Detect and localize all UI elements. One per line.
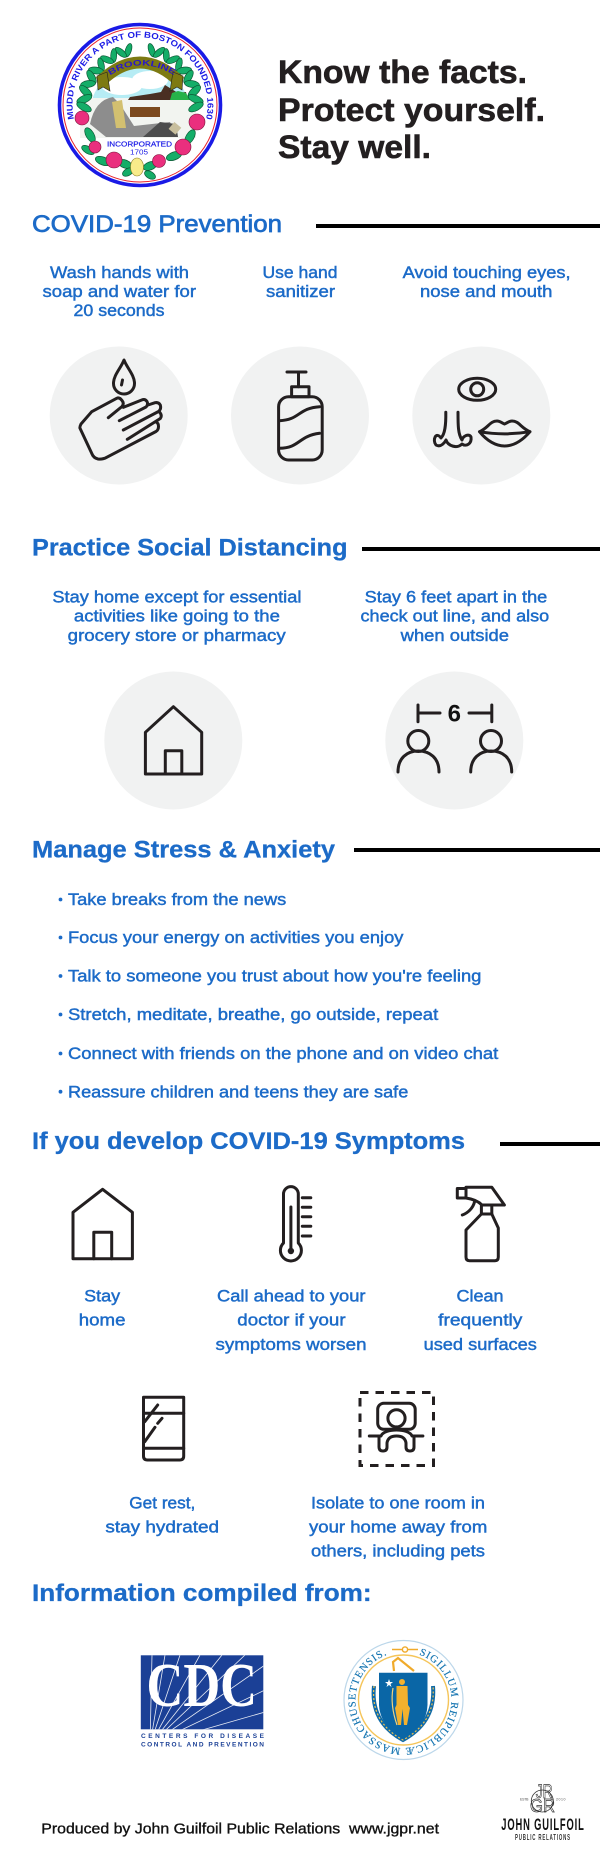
text: use hand sanitizer bbox=[262, 264, 338, 301]
logo: CDC bbox=[141, 1652, 265, 1748]
logo: CDC: CENTERS FOR DISEASE bbox=[141, 1733, 265, 1740]
text: stay home except essentials: Stay home except for essential bbox=[52, 589, 301, 607]
text: get rest: Get rest, bbox=[129, 1494, 195, 1512]
list: stress tips: Stretch, meditate, breathe, go outside, repeat bbox=[68, 1006, 439, 1024]
text: producer credit: Produced by John Guilfoil Public Relations www.jgpr.net bbox=[41, 1820, 440, 1837]
text: stay 6 feet apart bbox=[360, 589, 549, 645]
text: clean surfaces: Clean bbox=[456, 1288, 504, 1306]
icon: sanitizer pump bottle bbox=[231, 346, 369, 484]
icon: house bbox=[104, 672, 242, 810]
logo: John Guilfoil Public Relations bbox=[501, 1782, 584, 1842]
text: avoid touching face: Avoid touching eyes, bbox=[403, 264, 571, 282]
text: isolate: Isolate to one room in bbox=[311, 1494, 485, 1512]
logo: CDC: CONTROL AND PREVENTION bbox=[141, 1742, 264, 1748]
text: stay 6 feet apart: Stay 6 feet apart in the bbox=[365, 589, 547, 607]
list: stress tips: Connect with friends on the phone and on video chat bbox=[68, 1045, 499, 1063]
text: stay home: home bbox=[79, 1312, 126, 1330]
logo: CDC: CDC bbox=[146, 1652, 257, 1720]
icon: glass of water bbox=[144, 1397, 184, 1460]
text: call ahead: doctor if your bbox=[237, 1312, 346, 1330]
text: wash hands: soap and water for bbox=[42, 283, 197, 301]
logo: John Guilfoil Public Relations: GR bbox=[530, 1796, 555, 1816]
list: stress tips: Take breaks from the news bbox=[68, 891, 286, 909]
logo: John Guilfoil Public Relations: JR bbox=[536, 1782, 553, 1803]
list: stress tips: Talk to someone you trust about how you're feeling bbox=[68, 968, 481, 986]
text: call ahead: symptoms worsen bbox=[216, 1336, 366, 1354]
text: stay home except essentials bbox=[52, 589, 301, 645]
text: stay 6 feet apart: check out line, and also bbox=[360, 608, 549, 626]
text: wash hands: Wash hands with bbox=[50, 264, 189, 282]
logo: Town of Brookline seal bbox=[58, 22, 222, 188]
text: wash hands bbox=[42, 264, 197, 320]
text: stay home except essentials: activities like going to the bbox=[74, 608, 280, 626]
icon: person isolated in room bbox=[360, 1392, 434, 1466]
title: Stay well. bbox=[278, 129, 431, 165]
text: isolate: your home away from bbox=[309, 1518, 487, 1536]
logo: John Guilfoil Public Relations: JOHN GUILFOIL bbox=[501, 1815, 584, 1834]
heading: COVID-19 Prevention: COVID-19 Prevention bbox=[32, 211, 282, 238]
text: clean surfaces: used surfaces bbox=[424, 1336, 537, 1354]
heading: If you develop COVID-19 Symptoms: If you develop COVID-19 Symptoms bbox=[32, 1128, 465, 1155]
logo: Town of Brookline seal: INCORPORATED bbox=[107, 140, 173, 148]
icon: hand washing with water drop bbox=[50, 346, 188, 484]
icon: two people 6 feet apart: 6 bbox=[448, 700, 461, 728]
logo: Town of Brookline seal: 1705 bbox=[130, 148, 148, 156]
icon: two people 6 feet apart bbox=[385, 672, 523, 810]
text: isolate: others, including pets bbox=[311, 1543, 485, 1561]
text: call ahead: Call ahead to your bbox=[217, 1288, 366, 1306]
text: isolate bbox=[309, 1494, 487, 1561]
text: stay home: Stay bbox=[84, 1288, 121, 1306]
text: stay home bbox=[79, 1288, 126, 1330]
logo: Massachusetts state seal: SIGILLUM REIPUBLICÆ MASSACHUSETTENSIS. bbox=[348, 1648, 458, 1755]
logo: Town of Brookline seal: MUDDY RIVER A PART OF BOSTON FOUNDED 1630 bbox=[66, 31, 214, 120]
text: use hand sanitizer: sanitizer bbox=[266, 283, 336, 301]
logo: Town of Brookline seal: BROOKLINE bbox=[108, 60, 176, 75]
logo: John Guilfoil Public Relations: 2010 bbox=[556, 1798, 566, 1802]
logo: John Guilfoil Public Relations: PUBLIC RELATIONS bbox=[515, 1834, 570, 1842]
heading: Manage Stress & Anxiety: Manage Stress & Anxiety bbox=[32, 837, 336, 864]
logo: John Guilfoil Public Relations: ESTB bbox=[520, 1798, 529, 1802]
text: clean surfaces bbox=[424, 1288, 537, 1354]
icon: thermometer bbox=[280, 1187, 311, 1261]
text: clean surfaces: frequently bbox=[438, 1312, 523, 1330]
icon: house stay home bbox=[73, 1189, 132, 1259]
list: stress tips bbox=[59, 891, 499, 1101]
text: avoid touching face bbox=[403, 264, 571, 301]
text: stay 6 feet apart: when outside bbox=[400, 627, 509, 645]
title bbox=[278, 54, 545, 165]
text: stay home except essentials: grocery store or pharmacy bbox=[68, 627, 287, 645]
text: get rest bbox=[105, 1494, 219, 1536]
title: Protect yourself. bbox=[278, 92, 545, 128]
list: stress tips: Focus your energy on activities you enjoy bbox=[68, 929, 404, 947]
heading: Practice Social Distancing: Practice Social Distancing bbox=[32, 535, 348, 562]
icon: spray bottle bbox=[457, 1187, 504, 1261]
text: avoid touching face: nose and mouth bbox=[420, 283, 552, 301]
icon: eye nose and mouth bbox=[412, 346, 550, 484]
text: wash hands: 20 seconds bbox=[74, 302, 164, 320]
title: Know the facts. bbox=[278, 54, 527, 90]
text: use hand sanitizer: Use hand bbox=[262, 264, 338, 282]
list: stress tips: Reassure children and teens they are safe bbox=[68, 1083, 408, 1101]
text: get rest: stay hydrated bbox=[105, 1518, 219, 1536]
text: call ahead bbox=[216, 1288, 366, 1354]
heading: Information compiled from: Information compiled from: bbox=[32, 1580, 372, 1607]
